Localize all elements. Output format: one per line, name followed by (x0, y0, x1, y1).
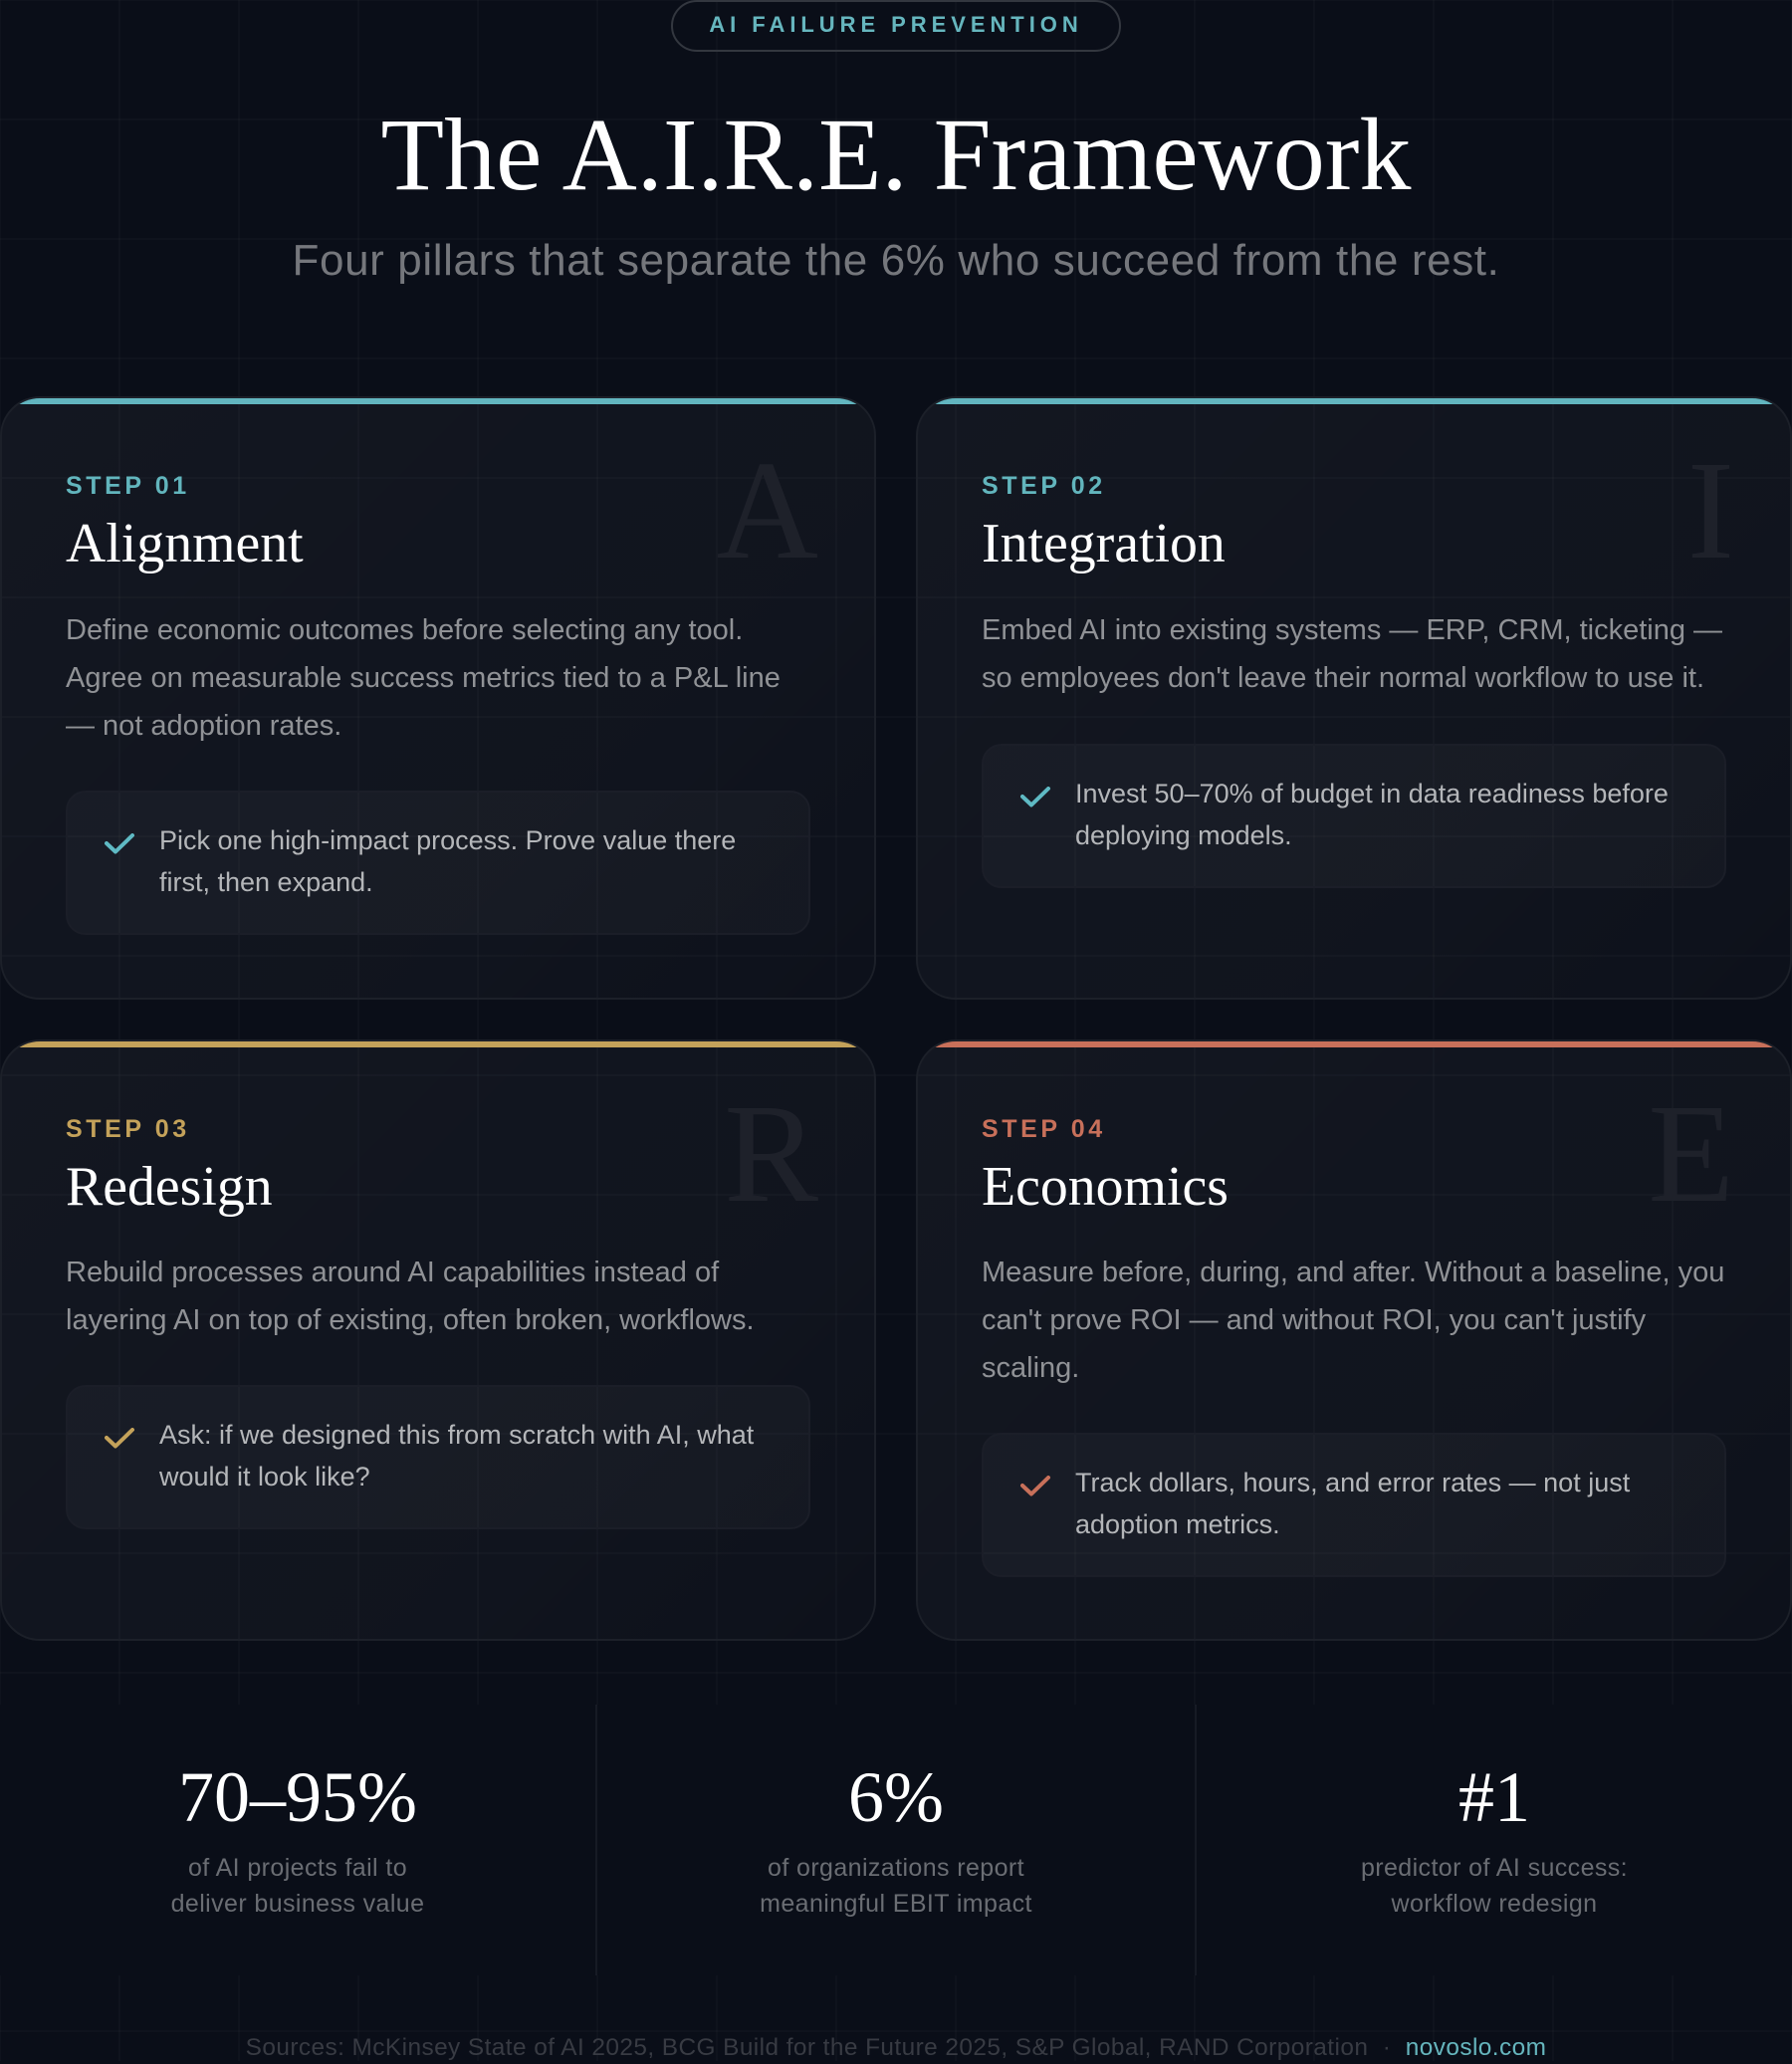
description: Embed AI into existing systems — ERP, CRM, ticketing — (982, 613, 1722, 645)
title: The A.I.R.E. Framework (381, 97, 1411, 212)
step label: STEP 03 (66, 1115, 190, 1143)
callout text: first, then expand. (159, 866, 373, 896)
subtitle: Four pillars that separate the 6% who succeed from the rest. (293, 236, 1499, 285)
footer sources: Sources: McKinsey State of AI 2025, BCG Build for the Future 2025, S&P Global, RAND Corporation · novoslo.com (246, 2034, 1546, 2061)
panel: step 01 alignment (0, 396, 876, 1000)
callout text: Ask: if we designed this from scratch with AI, what (159, 1420, 754, 1450)
accent bar (916, 398, 1792, 404)
stat label: predictor of AI success: (1361, 1854, 1628, 1882)
stat number: 70–95% (178, 1757, 417, 1837)
watermark letter: E (1648, 1074, 1734, 1232)
stat label (171, 1854, 424, 1918)
description (66, 613, 781, 741)
icon: check (1020, 1476, 1051, 1496)
callout (982, 1433, 1726, 1577)
callout text (1075, 779, 1669, 850)
stat: failure rate (171, 1757, 424, 1918)
callout text: Pick one high-impact process. Prove value there (159, 824, 736, 854)
callout text: Track dollars, hours, and error rates — not just (1075, 1468, 1630, 1497)
stat label: deliver business value (171, 1890, 424, 1918)
icon: check (105, 833, 135, 854)
callout text: deploying models. (1075, 820, 1292, 850)
stat label (760, 1854, 1032, 1918)
callout text: Invest 50–70% of budget in data readiness before (1075, 779, 1669, 808)
description: Agree on measurable success metrics tied to a P&L line (66, 661, 781, 693)
icon: check (1020, 787, 1051, 807)
panel: step 03 redesign (0, 1039, 876, 1641)
card heading: Alignment (66, 513, 304, 574)
description: layering AI on top of existing, often broken, workflows. (66, 1304, 755, 1336)
accent bar (0, 1041, 876, 1047)
stat label (1361, 1854, 1628, 1918)
badge: AI failure prevention (671, 0, 1121, 52)
stat number: 6% (848, 1757, 944, 1837)
stat: success share (760, 1757, 1032, 1918)
watermark letter: I (1687, 431, 1734, 588)
card heading: Redesign (66, 1156, 273, 1218)
watermark letter: A (716, 431, 818, 588)
callout (66, 791, 810, 935)
accent bar (916, 1041, 1792, 1047)
card heading: Integration (982, 513, 1226, 574)
step label: STEP 02 (982, 472, 1106, 500)
step label: STEP 04 (982, 1115, 1106, 1143)
description: — not adoption rates. (66, 709, 341, 741)
description: can't prove ROI — and without ROI, you can't justify (982, 1304, 1646, 1336)
description (982, 613, 1722, 693)
callout text: would it look like? (159, 1462, 370, 1491)
card heading: Economics (982, 1156, 1229, 1218)
callout (66, 1385, 810, 1529)
description: Define economic outcomes before selecting any tool. (66, 613, 743, 645)
callout text: adoption metrics. (1075, 1509, 1280, 1539)
stat label: of AI projects fail to (188, 1854, 407, 1882)
description: so employees don't leave their normal workflow to use it. (982, 661, 1704, 693)
panel: step 04 economics (916, 1039, 1792, 1641)
stat label: of organizations report (768, 1854, 1024, 1882)
step label: STEP 01 (66, 472, 190, 500)
callout text (159, 824, 736, 896)
description (982, 1257, 1724, 1384)
callout (982, 744, 1726, 888)
description: Rebuild processes around AI capabilities instead of (66, 1257, 719, 1288)
badge: AI failure prevention: AI FAILURE PREVENTION (709, 12, 1083, 37)
stat label: workflow redesign (1392, 1890, 1597, 1918)
accent bar (0, 398, 876, 404)
callout text (159, 1420, 755, 1491)
description (66, 1257, 755, 1336)
callout text (1075, 1468, 1631, 1539)
panel: step 02 integration (916, 396, 1792, 1000)
stat label: meaningful EBIT impact (760, 1890, 1032, 1918)
stats row (0, 1705, 1792, 1975)
icon: check (105, 1428, 135, 1449)
stat: top predictor (1361, 1757, 1628, 1918)
description: Measure before, during, and after. Without a baseline, you (982, 1257, 1724, 1288)
description: scaling. (982, 1352, 1079, 1384)
watermark letter: R (724, 1074, 818, 1232)
stat number: #1 (1458, 1757, 1530, 1837)
